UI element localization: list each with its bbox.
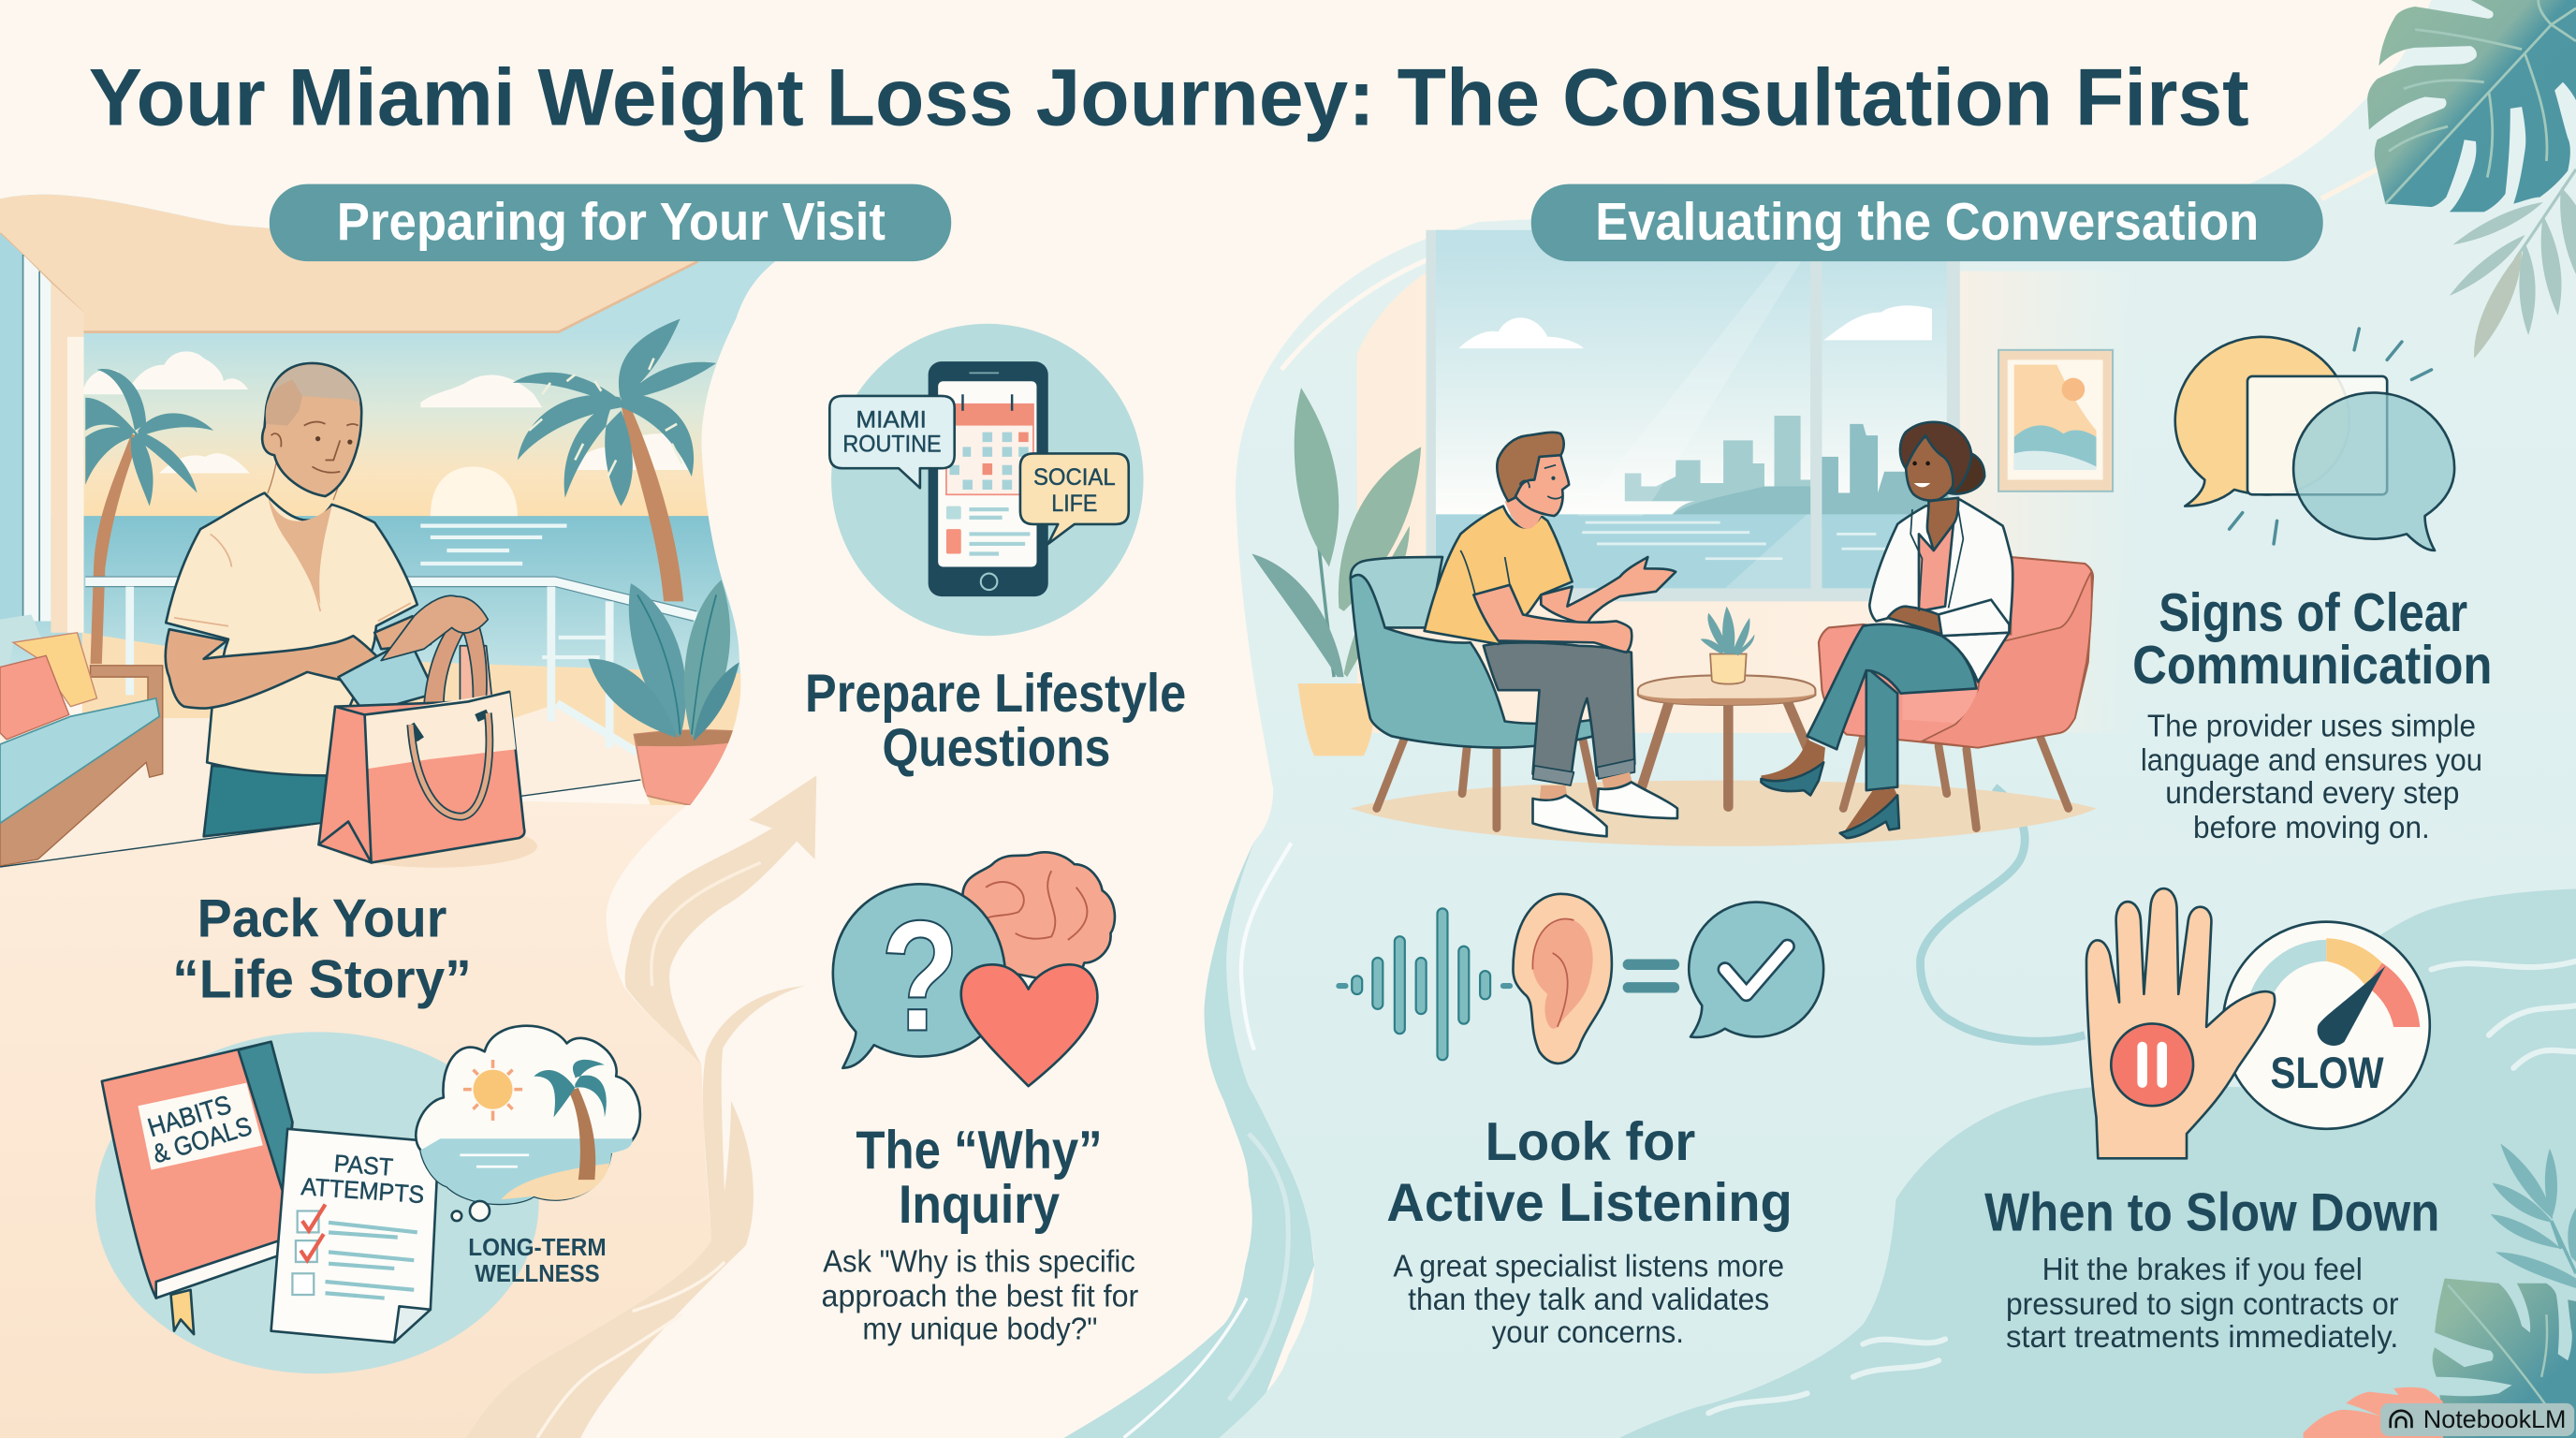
icon: phone with lifestyle bubbles: [829, 324, 1144, 636]
heading: the why inquiry: Inquiry: [899, 1175, 1060, 1235]
illustration: notebook, checklist and thought bubble: [95, 1026, 640, 1373]
blue armchair: [1351, 557, 1597, 829]
text: clear communication body: The provider uses simple: [2147, 709, 2476, 743]
palm right: [513, 319, 716, 601]
heart: [961, 964, 1097, 1086]
label: long-term wellness: [468, 1233, 607, 1287]
heading: pack your life story: [172, 888, 472, 1009]
palm left: [85, 369, 213, 664]
icon: stop hand with pause: [2086, 888, 2275, 1158]
seated doctor: [1761, 422, 2012, 838]
heading: look for active listening: Look for: [1486, 1112, 1695, 1172]
heading: look for active listening: [1386, 1112, 1793, 1233]
left wall window: [0, 233, 23, 621]
heading: when to slow down: When to Slow Down: [1984, 1183, 2439, 1243]
heading: prepare lifestyle questions: Questions: [882, 718, 1110, 778]
checklist: PAST: [333, 1149, 394, 1181]
railing: [85, 577, 696, 753]
thought cloud: [416, 1026, 640, 1221]
text: slow down body: Hit the brakes if you feel: [2042, 1253, 2363, 1287]
decoration: water waves: [1708, 961, 2576, 1413]
heading: signs of clear communication: [2132, 583, 2492, 696]
sun: [431, 466, 518, 516]
arrow: journey ribbon: [465, 775, 816, 1438]
text: active listening body: [1393, 1250, 1784, 1350]
heading: prepare lifestyle questions: [805, 664, 1186, 778]
notebook: & GOALS: [149, 1111, 256, 1168]
notebook: HABITS: [144, 1090, 235, 1142]
rug: [1351, 781, 2097, 846]
heading: pack your life story: Pack Your: [198, 888, 446, 948]
text: slow down body: pressured to sign contracts or: [2006, 1287, 2398, 1322]
title: Your Miami Weight Loss Journey: The Consultation First: [89, 52, 2249, 142]
text: clear communication body: before moving on.: [2193, 811, 2430, 845]
coral armchair: [1819, 557, 2093, 829]
notebook: [102, 1042, 292, 1334]
heading: the why inquiry: The “Why”: [856, 1121, 1103, 1181]
bubble: miami routine: [829, 396, 955, 488]
pill heading: evaluating: [1531, 184, 2323, 261]
label: long-term wellness: LONG-TERM: [468, 1233, 607, 1261]
bubble: miami routine: MIAMI: [856, 407, 927, 433]
text: why inquiry body: approach the best fit for: [822, 1279, 1138, 1313]
icon: slow speedometer: [2223, 922, 2430, 1129]
panel: beach balcony scene: [0, 181, 788, 868]
man packing: [166, 363, 431, 836]
side table: [1638, 607, 1815, 807]
heading: look for active listening: Active Listening: [1386, 1173, 1793, 1233]
text: clear communication body: understand every step: [2165, 776, 2459, 811]
bubble: social life: [1020, 453, 1129, 544]
text: active listening body: than they talk and validates: [1408, 1283, 1769, 1317]
text: why inquiry body: Ask "Why is this specific: [823, 1244, 1135, 1279]
heading: the why inquiry: [856, 1121, 1103, 1235]
tote bag: [318, 595, 537, 868]
clouds: [82, 351, 690, 473]
heading: signs of clear communication: Signs of Clear: [2159, 583, 2467, 643]
icon: ear, sound wave and check: [1339, 894, 1823, 1064]
icon: slow speedometer: SLOW: [2271, 1049, 2384, 1098]
skyline: [1625, 416, 1810, 588]
text: why inquiry body: [822, 1244, 1138, 1346]
text: slow down body: [2006, 1253, 2398, 1355]
bubble: social life: SOCIAL: [1033, 465, 1116, 491]
icon: palm frond top right: [2450, 169, 2576, 359]
badge: NotebookLM: [2380, 1403, 2574, 1436]
bubble: social life: LIFE: [1051, 492, 1097, 517]
brain: [962, 852, 1115, 986]
potted plant: [588, 580, 739, 805]
badge: NotebookLM: NotebookLM: [2423, 1404, 2566, 1433]
text: slow down body: start treatments immediately.: [2006, 1320, 2398, 1355]
tall plant: [1251, 388, 1421, 756]
speech bubble question: ?: [881, 887, 959, 1064]
framed picture: [1998, 350, 2113, 492]
heading: pack your life story: “Life Story”: [172, 949, 472, 1009]
label: long-term wellness: WELLNESS: [475, 1259, 600, 1287]
checklist: [271, 1129, 439, 1343]
seated patient: [1425, 433, 1677, 836]
speech bubble question: [833, 884, 1005, 1068]
floor line: [0, 781, 640, 868]
heading: signs of clear communication: Communication: [2132, 636, 2492, 696]
pill heading: evaluating: Evaluating the Conversation: [1595, 192, 2259, 251]
roof: [0, 195, 698, 332]
checklist: ATTEMPTS: [300, 1172, 425, 1209]
text: active listening body: A great specialist listens more: [1393, 1250, 1784, 1284]
pill heading: preparing: Preparing for Your Visit: [337, 192, 886, 251]
pill heading: preparing: [270, 184, 951, 261]
window: [1426, 230, 1960, 601]
icon: question bubble, brain and heart: [833, 852, 1115, 1086]
panel: consultation room scene: [1251, 230, 2113, 846]
decorative path line: [1921, 787, 2085, 1041]
icon: monstera leaf top right: [2367, 0, 2576, 212]
icon: tropical leaves bottom right: [2304, 1144, 2576, 1438]
icon: clear communication bubbles: [2175, 329, 2454, 550]
text: clear communication body: language and ensures you: [2141, 743, 2482, 778]
sofa: [0, 614, 163, 866]
heading: prepare lifestyle questions: Prepare Lifestyle: [805, 664, 1186, 724]
bubble: miami routine: ROUTINE: [842, 433, 942, 458]
text: active listening body: your concerns.: [1492, 1315, 1684, 1350]
text: why inquiry body: my unique body?": [862, 1312, 1097, 1346]
text: clear communication body: [2141, 709, 2482, 845]
